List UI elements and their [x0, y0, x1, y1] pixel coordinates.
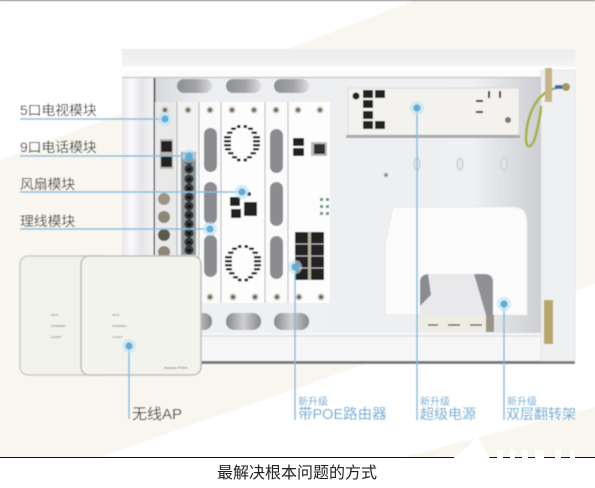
wireless AP panels: CLIENT [112, 335, 123, 339]
bottom rule [0, 457, 595, 458]
wireless AP panels: WI-FI [112, 313, 119, 317]
door [541, 70, 575, 361]
board slots [204, 128, 283, 279]
wireless AP panels: INTERNET [112, 324, 127, 328]
label: POE router: 带POE路由器 [298, 406, 387, 423]
ground wire and hinges [526, 68, 570, 344]
callout lines [20, 107, 504, 420]
label: flip bracket: 新升级 [507, 395, 537, 408]
cabinet [122, 49, 575, 364]
power module [346, 88, 520, 138]
callout dots [122, 101, 511, 353]
module boards [155, 102, 330, 303]
label: POE router: 新升级 [298, 395, 328, 408]
phone module ports [181, 152, 196, 255]
label: super power: 超级电源 [420, 406, 476, 422]
left module labels: 9口电话模块 [20, 140, 97, 155]
label: flip bracket: 双层翻转架 [506, 406, 576, 422]
wireless AP panels [20, 256, 201, 375]
left module labels: 理线模块 [20, 214, 75, 229]
left module labels: 5口电视模块 [20, 103, 97, 118]
wall mount holes [384, 158, 507, 177]
TV module ports [158, 139, 173, 258]
caption: 最解决根本问题的方式 [217, 464, 377, 482]
wireless AP panels: WI-FI [51, 313, 58, 317]
label: super power: 新升级 [420, 395, 450, 408]
wireless AP panels: Access Point [164, 365, 188, 370]
watermark remnant [452, 434, 575, 459]
left module labels [20, 103, 97, 229]
label: POE router [298, 395, 387, 423]
screws [161, 106, 325, 301]
label: wireless AP: 无线AP [132, 406, 182, 423]
wireless AP panels: INTERNET [51, 324, 66, 328]
flip bracket [385, 207, 527, 332]
wireless AP panels: CLIENT [51, 335, 62, 339]
router ports [293, 138, 329, 280]
left module labels: 风扇模块 [20, 177, 75, 192]
label: flip bracket [506, 395, 576, 422]
left wall edge [154, 78, 156, 255]
label: super power [420, 395, 476, 422]
fan vents and controls [224, 125, 261, 282]
rail slots [177, 79, 309, 330]
